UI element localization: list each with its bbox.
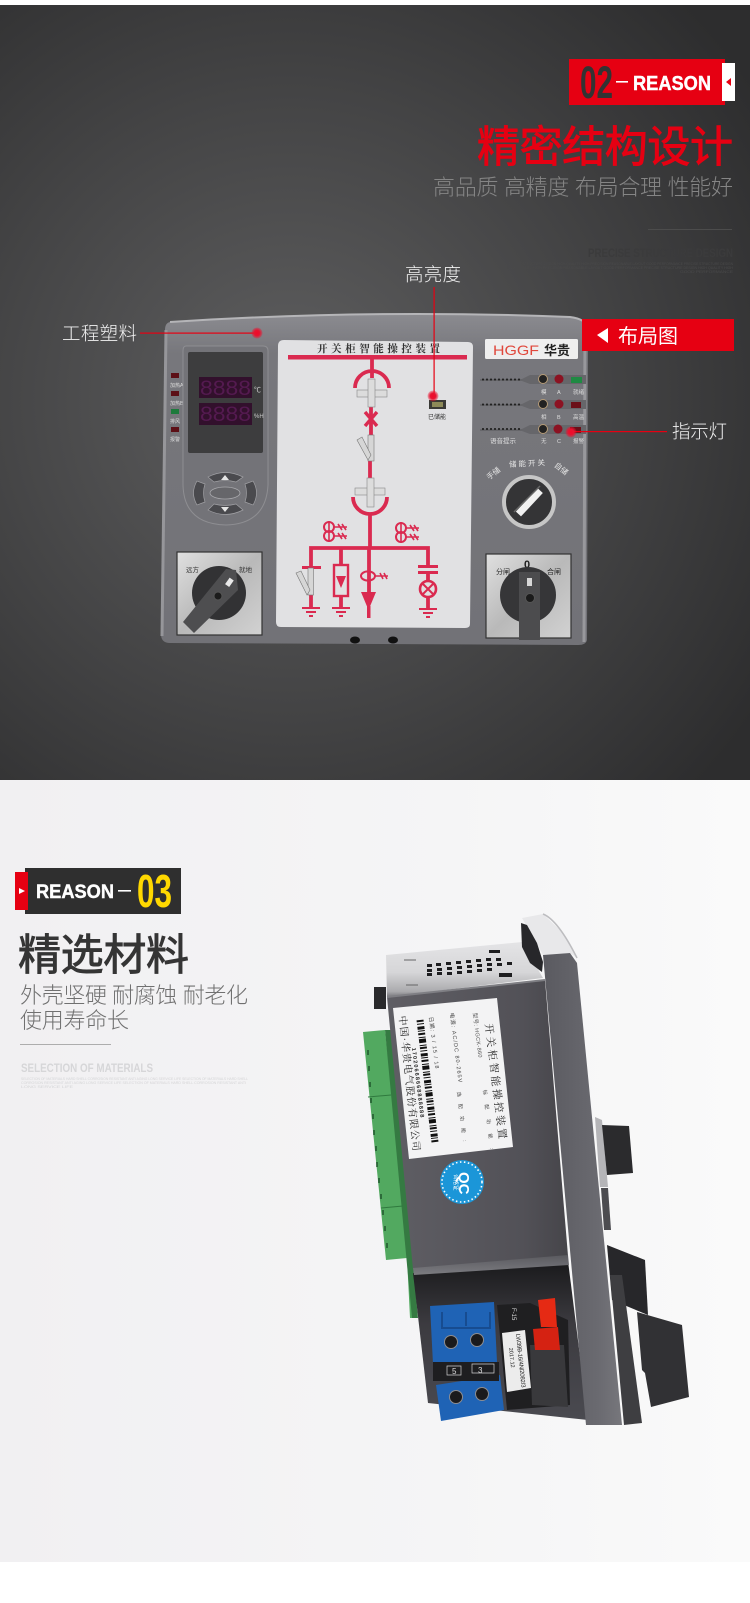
rotary switch: remote / local: 远方: [186, 565, 200, 574]
english caption block: [507, 229, 734, 274]
panel housing: [161, 314, 588, 645]
product label: 标配功能:: [481, 1089, 495, 1150]
product label: 选配功能:: [455, 1091, 468, 1142]
indicator rows: 相: [541, 413, 547, 421]
heading: precise structure design: 精密结构设计: [477, 124, 733, 172]
storage switch knob: 储能开关: [509, 457, 546, 469]
subheading: 高品质 高精度 布局合理 性能好: [433, 175, 733, 200]
heading: selected materials: 精选材料: [18, 932, 189, 980]
display bezel and controls: %H: [254, 414, 264, 420]
rotary switch: open / close: [486, 554, 571, 640]
rotary switch: remote / local: 就地: [239, 565, 252, 574]
product label: 开关柜智能操控装置: [482, 1023, 509, 1140]
indicator rows: 报警: [573, 437, 585, 445]
display bezel and controls: 8888: [200, 403, 251, 426]
english caption: materials: SELECTION OF MATERIALS: [21, 1061, 153, 1075]
indicator rows: B: [557, 415, 561, 421]
subheading: materials: 使用寿命长: [20, 1008, 129, 1033]
english caption block: PRECISE STRUCTURE DESIGN HIGH QUALITY HIGH PRECISION REASONABLE LAYOUT GOOD PERFORMANCE PRECISE STRUCTURE DESIGN: [507, 262, 733, 266]
left status indicators: 排风: [170, 418, 180, 425]
background: white top strip: [0, 0, 750, 5]
storage switch knob: [484, 457, 571, 527]
device: front panel: [161, 314, 588, 645]
rotary switch: remote / local: [177, 552, 262, 635]
front plate: [543, 953, 622, 1425]
blue terminal: [430, 1302, 504, 1421]
rear body: [387, 980, 568, 1269]
indicator rows: C: [557, 439, 561, 445]
indicator rows: 无: [541, 438, 547, 445]
subheading: materials: 外壳坚硬 耐腐蚀 耐老化: [20, 983, 248, 1008]
label: layout diagram: 布局图: [618, 325, 678, 348]
callout: engineering plastic: 工程塑料: [62, 323, 137, 344]
rotary switch body: 2017.12: [507, 1348, 515, 1368]
mounting holes: [350, 636, 398, 644]
rotary switch: open / close: 合闸: [547, 567, 561, 576]
product label: 型号: HGCK-860: [471, 1012, 484, 1058]
left status indicators: 报警: [170, 436, 180, 443]
QC seal: [440, 1160, 484, 1204]
ground symbols: [302, 608, 437, 617]
brand plate: [485, 339, 578, 359]
storage switch knob: 手储: [484, 464, 503, 482]
english caption: materials: LONG SERVICE LIFE: [21, 1085, 74, 1089]
indicator rows: 模: [541, 388, 547, 396]
indicator rows: 就绪: [573, 388, 585, 396]
product label: 中国·华贵电气股份有限公司: [396, 1015, 423, 1152]
english caption: materials: CORROSION RESISTANT ANTI AGING LONG SERVICE LIFE SELECTION OF MATERIALS HARD SHELL CORROSION RESISTANT ANTI: [21, 1081, 246, 1085]
indicator rows: 高温: [573, 413, 585, 421]
rotary switch: open / close: 0: [524, 559, 530, 571]
display bezel and controls: 8888: [200, 377, 251, 400]
english caption block: HIGH QUALITY HIGH PRECISION REASONABLE LAYOUT GOOD PERFORMANCE PRECISE STRUCTURE DESIGN HIGH QUALITY HIGH: [507, 266, 733, 270]
indicator rows: A: [557, 390, 561, 396]
english caption block: GOOD PERFORMANCE: [680, 270, 734, 274]
QC seal: 合格证: [452, 1174, 460, 1191]
brand plate: HGGF: [493, 342, 539, 358]
callout: indicator light: 指示灯: [672, 421, 727, 442]
rotary switch body: LW39B-16/4N/2082/3: [514, 1334, 526, 1389]
front handle: [607, 1245, 689, 1425]
badge: reason 03: [15, 865, 181, 917]
upper branch: [355, 358, 389, 480]
lower cavity: [413, 1261, 588, 1420]
energy storage indicator: [428, 400, 446, 421]
indicator rows: [480, 374, 586, 445]
brand plate: 华贵: [544, 343, 570, 358]
badge: reason 03: 03: [137, 865, 172, 917]
rear clip: [374, 987, 386, 1009]
english caption: materials: SELECTION OF MATERIALS HARD SHELL CORROSION RESISTANT ANTI AGING LONG SERVICE LIFE SELECTION OF MATERIALS HARD SHELL: [21, 1077, 248, 1081]
green terminal blocks: [363, 1030, 418, 1318]
body lip: [413, 1255, 569, 1275]
rotary switch body: [497, 1298, 570, 1410]
english caption: materials: [20, 1044, 248, 1089]
badge: reason 03: REASON: [36, 882, 114, 903]
storage switch knob: 自储: [552, 460, 571, 477]
left status indicators: 加热A: [170, 382, 184, 389]
blue terminal: 3: [478, 1366, 483, 1375]
indicator rows: 语音提示: [490, 436, 516, 445]
product label: [393, 998, 513, 1159]
device: side view: [363, 914, 689, 1425]
left status indicators: [170, 373, 184, 443]
label: layout diagram: [582, 319, 734, 351]
callout: engineering plastic: [62, 323, 262, 344]
mimic diagram plate: [276, 340, 473, 628]
callout: indicator light: [566, 421, 727, 442]
rotary switch: open / close: 分闸: [496, 567, 510, 576]
energy storage indicator: 已储能: [428, 413, 446, 421]
product label: 日期: 3 / 15 / 18: [427, 1016, 440, 1069]
blue terminal: 5: [452, 1367, 457, 1376]
curved front hood: [521, 914, 577, 972]
product label: 电源: AC/DC 80-265V: [448, 1012, 465, 1083]
background: light section: [0, 780, 750, 1562]
QC seal: QC: [455, 1172, 472, 1195]
lower bus and feeders: [311, 548, 428, 608]
subheading: materials: [20, 983, 248, 1033]
top vent surface: [386, 942, 543, 997]
badge: 02 reason: [569, 57, 735, 108]
badge: 02 reason: 02: [580, 57, 613, 108]
product label: 17020668668888888: [410, 1048, 425, 1118]
display bezel and controls: ℃: [254, 386, 261, 394]
badge: 02 reason: REASON: [633, 73, 711, 95]
current transformers: [324, 521, 347, 542]
background: dark section: [0, 5, 750, 780]
mimic diagram plate: 开关柜智能操控装置: [317, 342, 440, 355]
rotary switch body: F-15: [510, 1308, 516, 1321]
callout: high brightness: [405, 264, 461, 402]
front knob: [595, 1117, 633, 1230]
left status indicators: 加热B: [170, 400, 184, 407]
display bezel and controls: [183, 346, 268, 525]
callout: high brightness: 高亮度: [405, 264, 461, 285]
